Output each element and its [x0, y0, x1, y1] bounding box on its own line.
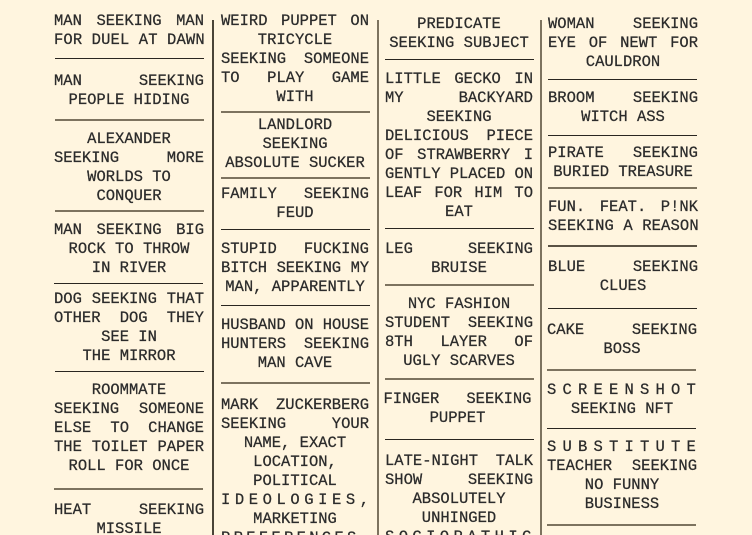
ad: cake boss: CAKE SEEKING	[547, 321, 697, 339]
ad: little gecko: SEEKING	[426, 108, 492, 126]
ad: buried treasure	[548, 144, 698, 181]
ad: alexander: WORLDS TO	[87, 168, 171, 186]
ad: apparently: BITCH SEEKING MY	[221, 259, 369, 277]
ad: mark zuckerberg: SEEKING YOUR	[221, 415, 369, 433]
ad: eye of newt: EYE OF NEWT FOR	[548, 34, 698, 52]
ad: nyc fashion: NYC FASHION	[408, 295, 510, 313]
ad: nyc fashion: UGLY SCARVES	[403, 352, 515, 370]
ad: roommate: ROOMMATE	[92, 381, 166, 399]
ad: mark zuckerberg: MARK ZUCKERBERG	[221, 396, 369, 414]
ad: apparently: MAN, APPARENTLY	[225, 278, 365, 296]
ad: weird puppet: TO PLAY GAME	[221, 69, 369, 87]
ad: nyc fashion: 8TH LAYER OF	[385, 333, 533, 351]
ad: big rock: MAN SEEKING BIG	[54, 221, 204, 239]
ad: witch ass: BROOM SEEKING	[548, 89, 698, 107]
column 3	[384, 14, 536, 535]
ad: predicate	[389, 14, 529, 52]
ad: mark zuckerberg: LOCATION,	[253, 453, 337, 471]
ad: witch ass: WITCH ASS	[581, 108, 665, 126]
ad: eye of newt	[548, 14, 698, 70]
ad: big rock	[54, 221, 204, 277]
ad: heat seeking missile: HEAT SEEKING	[54, 500, 204, 518]
column 4	[547, 14, 702, 526]
ad: man seeking man: FOR DUEL AT DAWN	[54, 31, 205, 49]
ad: fun feat pink: SEEKING A REASON	[548, 217, 699, 235]
ad: alexander: ALEXANDER	[87, 130, 171, 148]
ad: man cave	[221, 316, 369, 372]
ad: roommate: SEEKING SOMEONE	[54, 400, 204, 418]
column 2	[220, 12, 374, 535]
ad: predicate: SEEKING SUBJECT	[389, 34, 529, 52]
ad: mark zuckerberg: MARKETING	[253, 510, 337, 528]
ad: dog mirror: OTHER DOG THEY	[54, 308, 204, 326]
ad: landlord: ABSOLUTE SUCKER	[225, 154, 365, 172]
ad: eye of newt: CAULDRON	[586, 52, 660, 70]
ad: screenshot nft: SCREENSHOT	[547, 381, 702, 399]
ad: alexander: CONQUER	[96, 187, 162, 205]
ad: substitute teacher: NO FUNNY	[585, 476, 659, 494]
ad: substitute teacher: BUSINESS	[585, 495, 659, 513]
ad: eye of newt: WOMAN SEEKING	[548, 14, 698, 32]
ad: cake boss: BOSS	[603, 340, 641, 358]
column rule 1	[212, 20, 214, 535]
ad: heat seeking missile	[54, 500, 204, 535]
ad: big rock: IN RIVER	[92, 259, 166, 277]
ad: landlord	[225, 116, 365, 172]
ad: fun feat pink	[548, 198, 699, 235]
ad: dog mirror: SEE IN	[101, 328, 157, 346]
ad: mark zuckerberg: IDEOLOGIES,	[221, 491, 374, 509]
ad: dog mirror	[54, 290, 204, 364]
column 1	[54, 12, 205, 535]
ad: roommate: ELSE TO CHANGE	[54, 419, 204, 437]
ad: family feud: FEUD	[276, 204, 314, 222]
ad: alexander: SEEKING MORE	[54, 149, 204, 167]
ad: roommate	[54, 381, 204, 475]
ad: mark zuckerberg	[221, 396, 374, 535]
ad: late-night talk show: ABSOLUTELY	[412, 490, 506, 508]
ad: nyc fashion: STUDENT SEEKING	[385, 314, 533, 332]
ad: substitute teacher: SUBSTITUTE	[547, 438, 702, 456]
ad: buried treasure: BURIED TREASURE	[553, 163, 693, 181]
ad: dog mirror: DOG SEEKING THAT	[54, 290, 204, 308]
ad: nyc fashion	[385, 295, 533, 370]
ad: weird puppet: WEIRD PUPPET ON	[221, 12, 369, 30]
ad: predicate: PREDICATE	[417, 14, 501, 32]
ad: man seeking man	[54, 12, 205, 49]
ad: late-night talk show: UNHINGED	[422, 509, 496, 527]
ad: weird puppet: SEEKING SOMEONE	[221, 50, 369, 68]
ad: substitute teacher: TEACHER SEEKING	[547, 457, 697, 475]
ad: fun feat pink: FUN. FEAT. P!NK	[548, 198, 698, 216]
ad: buried treasure: PIRATE SEEKING	[548, 144, 698, 162]
ad: substitute teacher	[547, 438, 702, 513]
ad: alexander	[54, 130, 204, 205]
ad: apparently	[221, 240, 369, 296]
ad: witch ass	[548, 89, 698, 126]
ad: late-night talk show	[385, 452, 536, 535]
ad: late-night talk show: SHOW SEEKING	[385, 471, 533, 489]
ad: leg bruise	[385, 240, 533, 277]
ad: little gecko: MY BACKYARD	[385, 89, 533, 107]
ad: family feud: FAMILY SEEKING	[221, 185, 369, 203]
ad: cake boss	[547, 321, 697, 358]
ad: people hiding: MAN SEEKING	[54, 72, 204, 90]
ad: family feud	[221, 185, 369, 222]
ad: finger puppet: FINGER SEEKING	[384, 390, 532, 408]
ad: mark zuckerberg: POLITICAL	[253, 472, 337, 490]
ad: screenshot nft: SEEKING NFT	[571, 400, 673, 418]
ad: people hiding: PEOPLE HIDING	[69, 91, 189, 109]
ad: weird puppet: TRICYCLE	[258, 31, 332, 49]
ad: blue's clues	[548, 258, 698, 295]
ad: man cave: MAN CAVE	[258, 354, 332, 372]
ad: little gecko: LEAF FOR HIM TO	[385, 184, 533, 202]
ad: little gecko: EAT	[445, 203, 473, 221]
ad: little gecko: DELICIOUS PIECE	[385, 127, 533, 145]
ad: finger puppet	[384, 390, 532, 427]
ad: late-night talk show: LATE-NIGHT TALK	[385, 452, 533, 470]
ad: little gecko: GENTLY PLACED ON	[385, 165, 533, 183]
ad: blue's clues: CLUES	[600, 277, 646, 295]
ad: screenshot nft	[547, 381, 702, 418]
ad: weird puppet	[220, 12, 369, 106]
ad: big rock: ROCK TO THROW	[69, 240, 189, 258]
ad: little gecko: LITTLE GECKO IN	[385, 70, 533, 88]
ad: landlord: LANDLORD	[258, 116, 332, 134]
ad: people hiding	[54, 72, 204, 109]
ad: man seeking man: MAN SEEKING MAN	[54, 12, 204, 30]
ad: leg bruise: BRUISE	[431, 259, 487, 277]
ad: mark zuckerberg: NAME, EXACT	[244, 434, 346, 452]
ad: man cave: HUSBAND ON HOUSE	[221, 316, 369, 334]
ad: blue's clues: BLUE SEEKING	[548, 258, 698, 276]
ad: roommate: ROLL FOR ONCE	[69, 457, 189, 475]
ad: apparently: STUPID FUCKING	[221, 240, 369, 258]
ad: dog mirror: THE MIRROR	[82, 346, 176, 364]
ad: roommate: THE TOILET PAPER	[54, 438, 204, 456]
ad: finger puppet: PUPPET	[430, 409, 485, 427]
column rule 2	[377, 20, 379, 535]
ad: man cave: HUNTERS SEEKING	[221, 335, 369, 353]
column rule 3	[540, 20, 542, 535]
ad: leg bruise: LEG SEEKING	[385, 240, 533, 258]
ad: weird puppet: WITH	[276, 88, 314, 106]
ad: little gecko: OF STRAWBERRY I	[385, 146, 533, 164]
ad: little gecko	[385, 70, 533, 221]
ad: landlord: SEEKING	[262, 135, 328, 153]
